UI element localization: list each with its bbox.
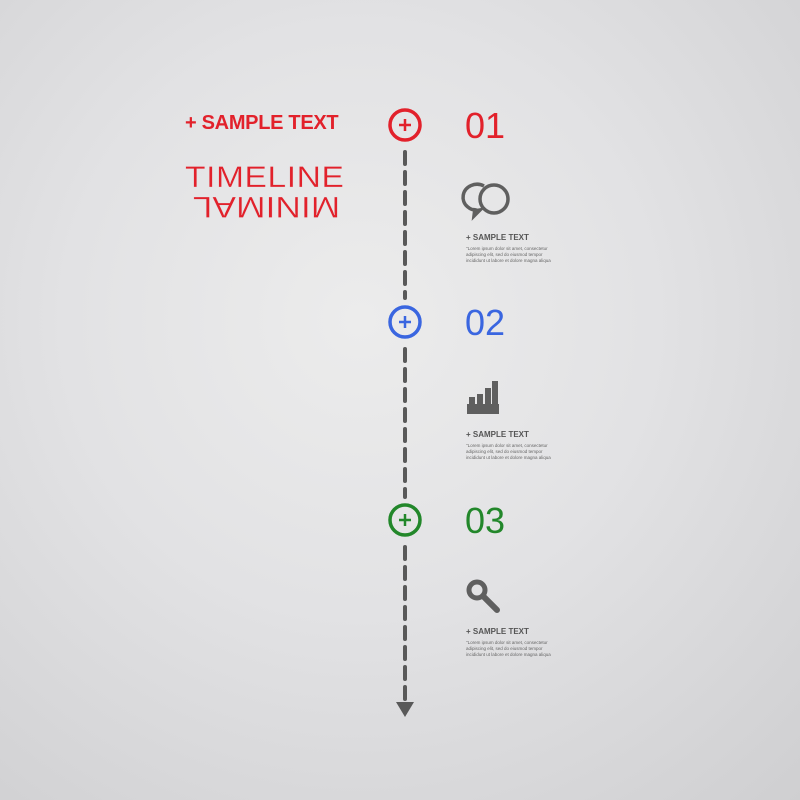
text block 3: [466, 627, 551, 657]
text block 1: [466, 233, 551, 263]
text: "Lorem ipsum dolor sit amet, consectetur adipiscing elit, sed do eiusmod tempor incididunt ut labore et dolore magna aliqua: [466, 246, 551, 263]
text block 2: [466, 430, 551, 460]
number 01: 01: [465, 105, 505, 146]
marker 01: [390, 110, 420, 140]
title: timeline minimal: TIMELINE: [185, 161, 344, 194]
text: + SAMPLE TEXT: [466, 627, 529, 636]
marker 02: [390, 307, 420, 337]
text: "Lorem ipsum dolor sit amet, consectetur adipiscing elit, sed do eiusmod tempor incididunt ut labore et dolore magna aliqua: [466, 640, 551, 657]
heading: sample text: + SAMPLE TEXT: [185, 112, 338, 134]
text: + SAMPLE TEXT: [466, 233, 529, 242]
marker 03: [390, 505, 420, 535]
icon: bar chart: [467, 381, 499, 414]
number 03: 03: [465, 500, 505, 541]
icon: magnifier: [469, 582, 497, 610]
number 02: 02: [465, 302, 505, 343]
icon: speech bubbles: [463, 184, 508, 216]
title: timeline minimal: [185, 161, 344, 223]
text: "Lorem ipsum dolor sit amet, consectetur adipiscing elit, sed do eiusmod tempor incididunt ut labore et dolore magna aliqua: [466, 443, 551, 460]
title: timeline minimal: MINIMAL: [192, 190, 340, 223]
text: + SAMPLE TEXT: [466, 430, 529, 439]
